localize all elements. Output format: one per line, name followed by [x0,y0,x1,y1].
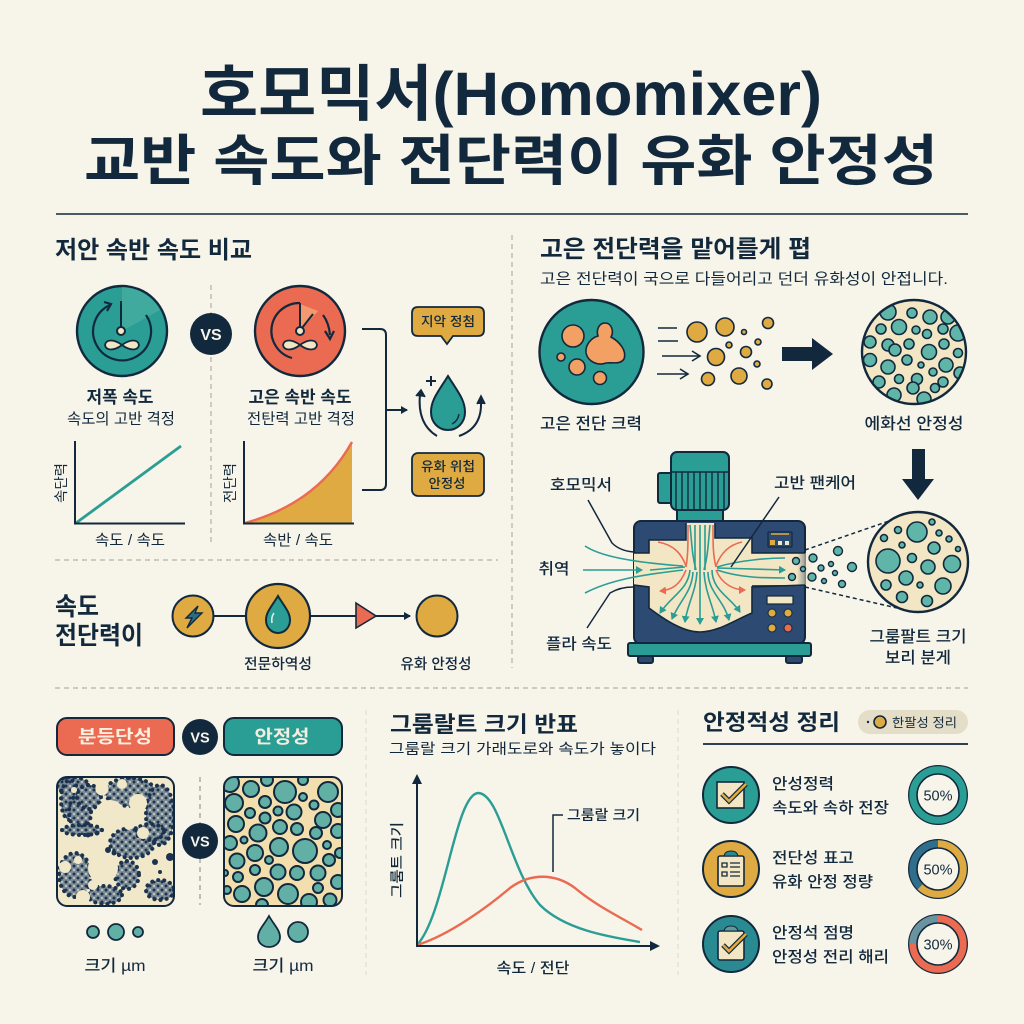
callout: bottom: 안정성 [428,476,466,491]
size labels: 크기 µm [252,957,314,975]
icon: lightning [172,596,214,636]
image: unstable emulsion [56,777,174,906]
flow labels: 전문하역성 [244,656,312,673]
callout: top: 지악 정첨 [421,314,475,329]
leader lines [587,497,897,628]
row 3 [703,914,968,974]
machine labels: 고반 팬케어 [774,474,856,492]
label: droplet size [870,628,966,667]
row 2 text: 유화 안정 정량 [772,873,873,891]
legend pill [858,710,968,734]
panel: speed comparison [53,237,485,549]
line chart [389,774,660,977]
chart: curve [222,441,354,549]
vs badge top [182,719,218,755]
chart: linear [53,441,185,549]
row 2 text: 전단성 표고 [772,849,854,867]
icon: checkbox [703,767,759,823]
vs badge middle [182,823,218,859]
heading: droplet size: 그룸랄트 크기 반표 [390,712,578,737]
panel: shear flow [55,584,472,673]
heading: shear flow [55,593,143,650]
pill: stability: 안정성 [254,727,310,747]
machine diagram [538,452,897,663]
label: high speed: 전탄력 고반 격정 [247,410,355,428]
label: droplet size: 보리 분게 [885,649,951,667]
dispersed droplets [788,546,856,588]
flow lines [583,525,785,624]
chart: linear: 속도 / 속도 [95,532,165,549]
icon: clipboard check [703,916,759,972]
block arrow down [902,449,934,500]
heading: summary: 안정적성 정리 [703,710,840,735]
donut 3: 30% [923,938,953,954]
heading: high shear: 고은 전단력을 맡어를게 폅 [540,236,811,263]
icon: coarse droplets [540,300,644,404]
chart: curve: 속반 / 속도 [263,532,333,549]
block arrow right [782,338,833,370]
label: low speed: 속도의 고반 격정 [67,410,175,428]
machine labels [538,474,856,653]
mixing chamber [634,523,815,632]
row 3 text: 안정석 점명 [772,924,854,942]
icon: droplet with arrows [416,376,485,436]
donut 3 [908,914,968,974]
heading: droplet size: 그룸랄 크기 가래도로와 속도가 놓이다 [389,741,656,758]
line chart: 그룸트 크기 [389,822,405,898]
donut 1 [908,765,968,825]
label: low speed: 저폭 속도 [86,388,154,407]
small droplets left [87,924,143,940]
machine labels: 취역 [538,560,570,578]
flow labels [244,656,472,673]
line chart: 그룸랄 크기 [567,807,640,823]
heading: shear flow: 전단력이 [55,622,143,650]
heading: droplet size [389,712,656,758]
broken droplets [687,318,774,389]
icon: drop circle [246,584,310,648]
size labels [84,957,314,975]
icon: magnified emulsion [868,512,968,612]
machine labels: 플라 속도 [546,635,612,653]
control panels [767,532,793,632]
chart: curve: 전단력 [222,463,238,503]
panel: dispersion vs stability [56,718,345,975]
callout: top [412,307,484,344]
vs badge: VS [200,327,222,344]
label: low speed [67,388,175,428]
label: high speed [247,388,355,428]
label: droplet size: 그룸팔트 크기 [870,628,966,646]
pill: stability [224,718,342,755]
image: stable emulsion [221,774,345,911]
row 2 [703,839,968,899]
chart: linear: 속단력 [53,463,69,503]
base [628,643,811,663]
machine labels: 호모믹서 [550,476,612,494]
icon: high speed impeller [255,286,345,376]
callout: bottom [412,453,484,496]
row 3 text [772,924,889,966]
size labels: 크기 µm [84,957,146,975]
legend pill: 한팔성 정리 [892,716,957,730]
shear arrows [657,328,700,374]
donut 1: 50% [923,788,953,804]
label: high speed: 고은 속반 속도 [248,388,352,407]
pill: dispersion [57,718,174,755]
title [84,60,938,192]
icon: clipboard [703,841,759,897]
donut 2 [908,839,968,899]
vs badge middle: VS [190,834,210,850]
vs badge top: VS [190,730,210,746]
heading: high shear [540,236,948,288]
donut 2: 50% [923,862,953,878]
flow labels: 유화 안정성 [400,656,472,673]
label: coarse: 고은 전단 크력 [540,415,642,433]
icon: emulsion circle [862,300,966,406]
row 3 text: 안정성 전리 해리 [772,948,889,966]
panel: droplet size chart [389,712,660,977]
vs badge [190,313,232,355]
heading: high shear: 고은 전단력이 국으로 다들어리고 던더 유화성이 안접니다. [540,270,948,288]
title: 호모믹서(Homomixer) [200,60,822,128]
icon: gold circle [416,596,458,636]
heading: speed comparison: 저안 속반 속도 비교 [55,237,252,264]
motor [658,452,729,521]
panel: high shear [538,236,968,667]
small droplets right [258,916,308,947]
heading: shear flow: 속도 [55,593,99,621]
row 2 text [772,849,873,891]
pill: dispersion: 분등단성 [78,727,152,747]
panel: stability summary [703,710,968,974]
title: 교반 속도와 전단력이 유화 안정성 [84,130,938,192]
line chart: 속도 / 전단 [496,960,570,977]
icon: triangle [356,603,376,628]
cabinet [634,521,805,644]
row 1 text: 속도와 속하 전장 [772,799,889,817]
row 1 [703,765,968,825]
bracket arrow [362,329,407,490]
callout: bottom: 유화 위첩 [421,459,475,474]
icon: low speed impeller [77,286,167,376]
row 1 text [772,775,889,817]
label: emulsion: 에화선 안정성 [864,415,964,433]
row 1 text: 안성정력 [772,775,834,793]
